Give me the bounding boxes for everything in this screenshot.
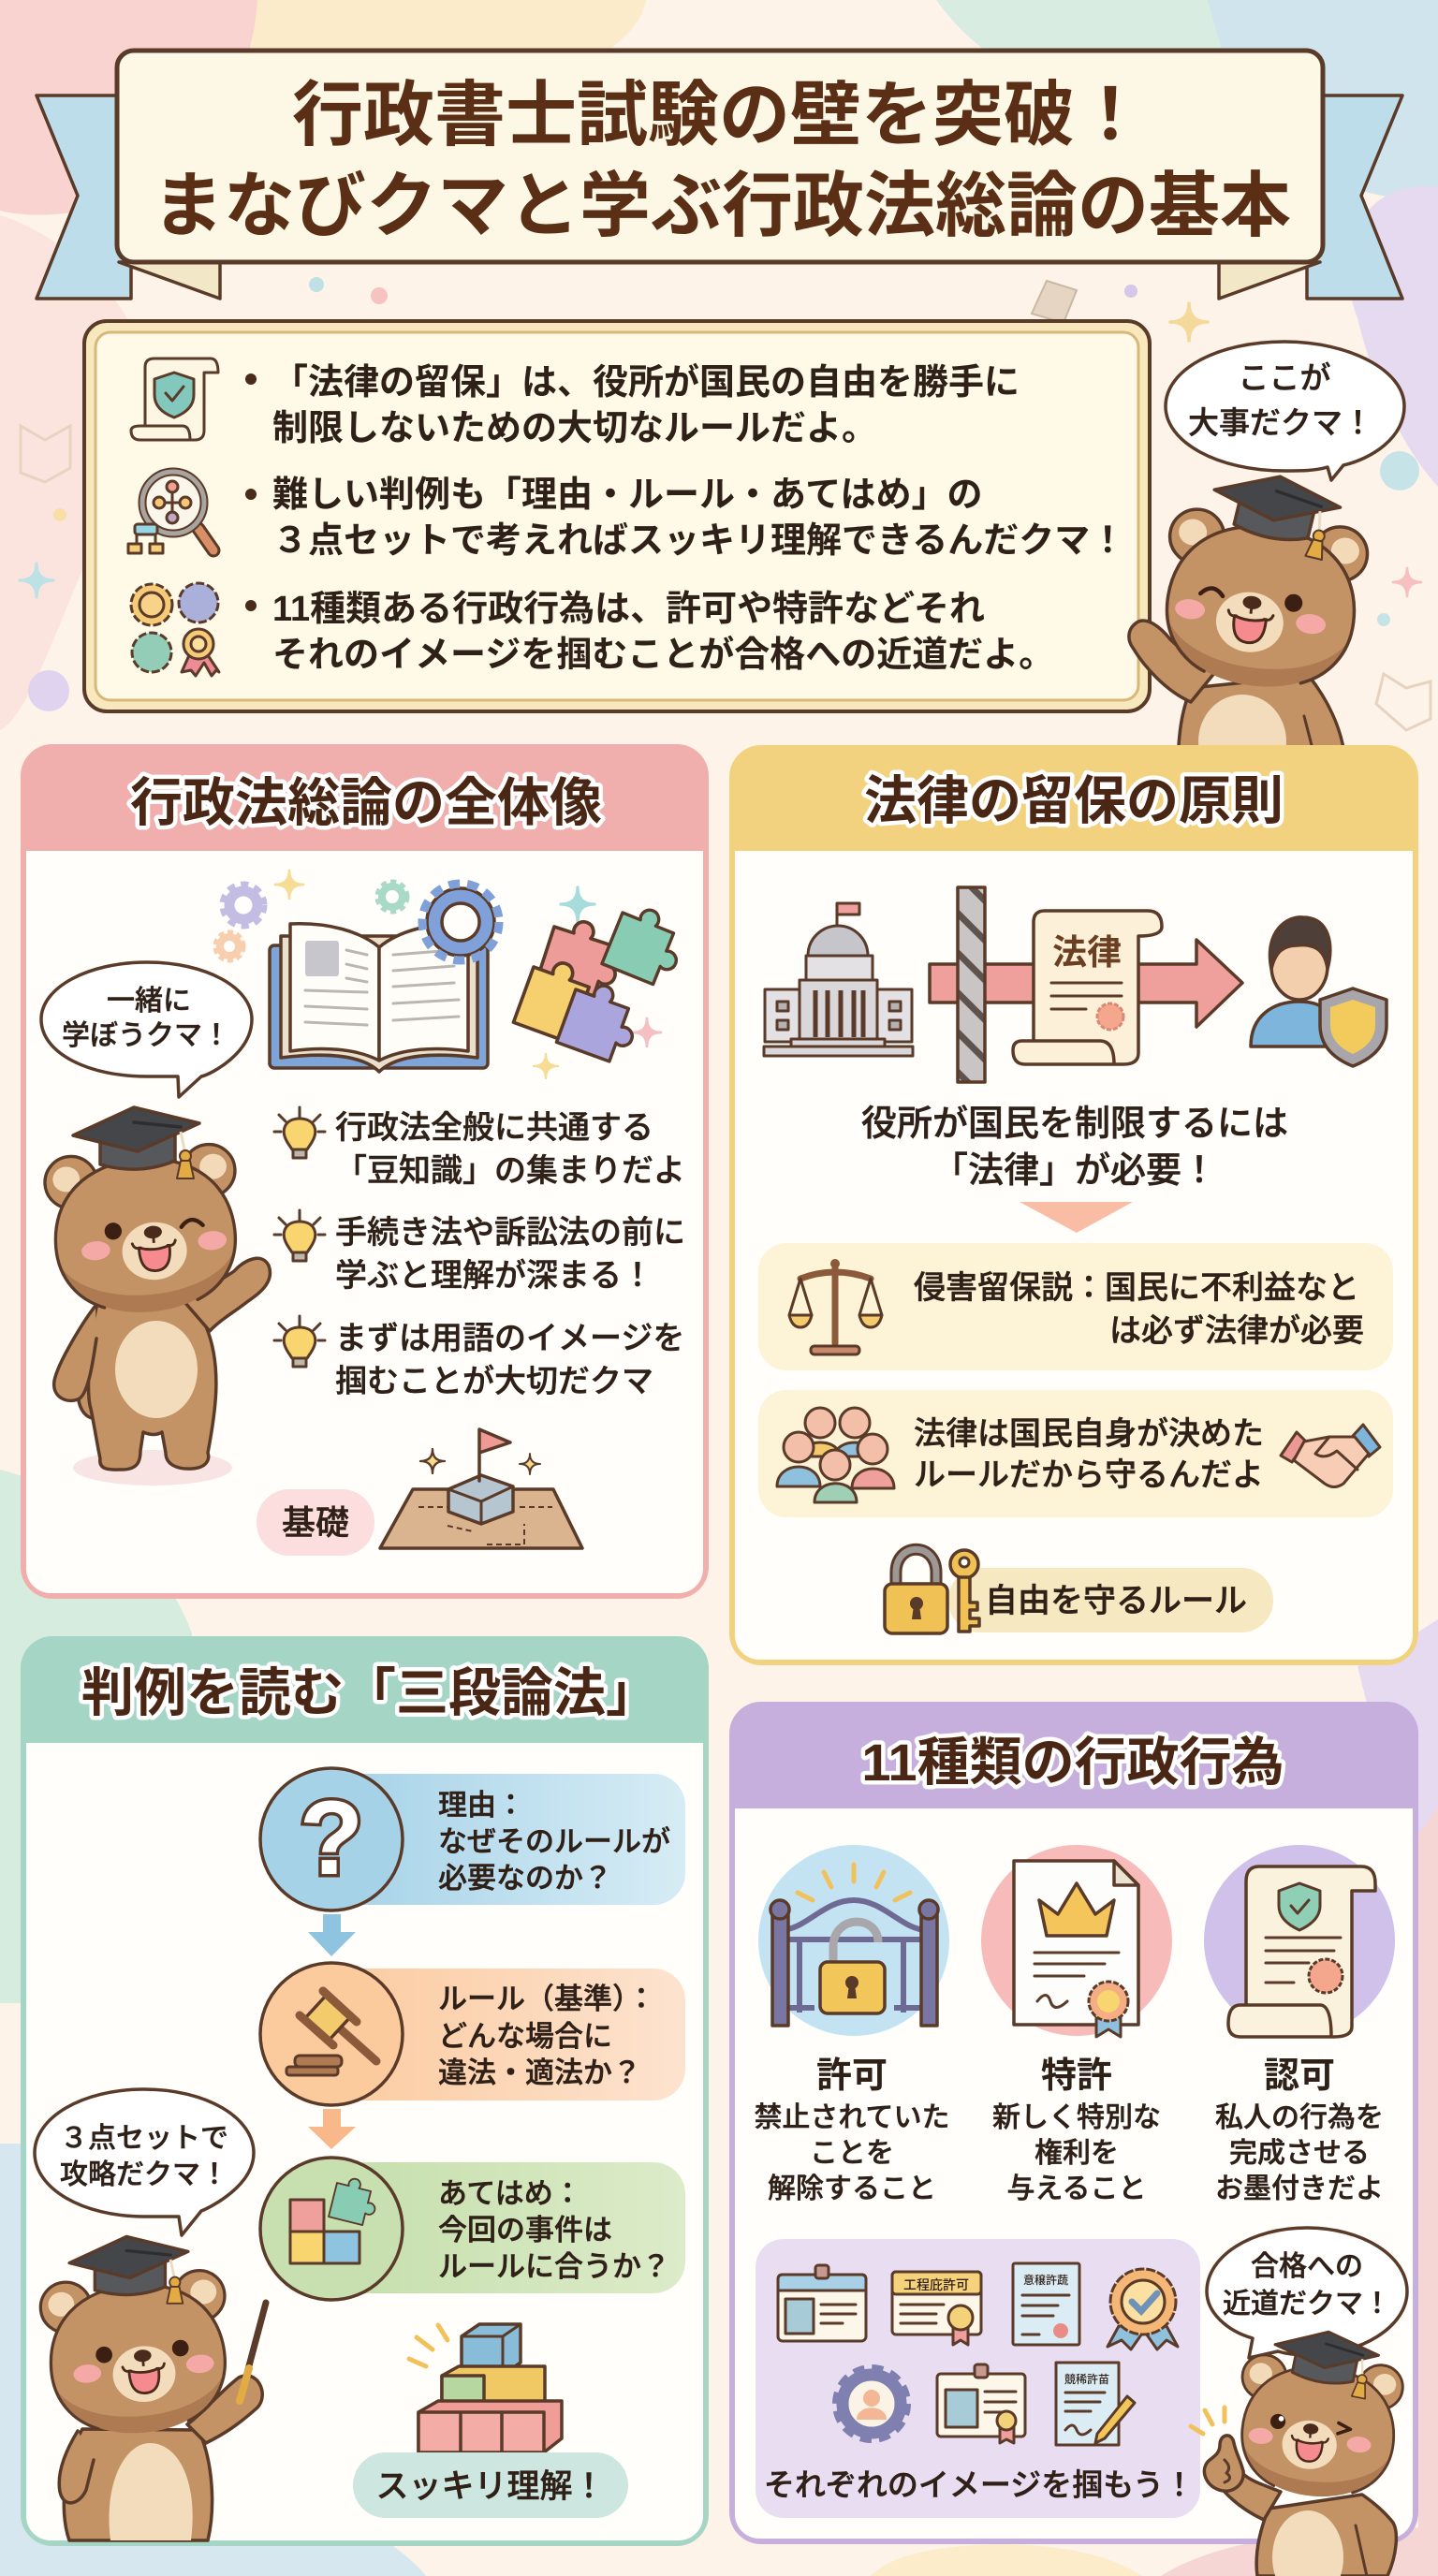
- bullet 3 text: 11種類ある行政行為は、許可や特許などそれ: [272, 590, 985, 629]
- icon: foundation with flag: [380, 1429, 582, 1548]
- item: approval: [1204, 1845, 1395, 2204]
- step: reason: ?: [300, 1779, 363, 1896]
- decorative sparkles and dots: [20, 277, 1431, 730]
- step: rule: ルール（基準）：: [438, 1983, 655, 2015]
- item: patent: 特許: [1041, 2056, 1112, 2096]
- item: approval: 認可: [1264, 2056, 1335, 2096]
- icon: protected person: [1251, 917, 1387, 1066]
- tip 1: [274, 1107, 685, 1189]
- item: permission: [754, 1845, 950, 2204]
- icon: document with pencil: 競稀許苗: [1064, 2372, 1109, 2386]
- title plate: [117, 51, 1323, 262]
- item: patent: 与えること: [1006, 2174, 1147, 2204]
- step: reason: 理由：: [438, 1789, 525, 1822]
- tip 2: [274, 1210, 685, 1294]
- panel: case law syllogism: [21, 1636, 709, 2546]
- bear mascot: [43, 1107, 270, 1486]
- step: application: 今回の事件は: [438, 2214, 612, 2247]
- statement: [861, 1105, 1288, 1191]
- tip 1: 「豆知識」の集まりだよ: [335, 1153, 685, 1189]
- icon: certificate with crown: [1014, 1861, 1138, 2037]
- heading: 判例を読む「三段論法」: [81, 1663, 658, 1722]
- speech bubble: 学ぼうクマ！: [62, 1020, 230, 1051]
- icon: scroll with shield: [1228, 1866, 1375, 2037]
- icon: puzzle pieces: [513, 900, 691, 1066]
- icon: document with pencil: [1056, 2363, 1135, 2445]
- item: permission: 解除すること: [768, 2174, 936, 2204]
- step: application: あてはめ：: [438, 2177, 582, 2210]
- step: application: [260, 2158, 685, 2300]
- statement: 役所が国民を制限するには: [861, 1105, 1288, 1144]
- text: ルールだから守るんだよ: [914, 1457, 1264, 1493]
- item: patent: [981, 1845, 1172, 2204]
- text: [914, 1416, 1264, 1493]
- statement: 「法律」が必要！: [932, 1151, 1217, 1191]
- speech bubble top right: ここが: [1238, 360, 1331, 395]
- pill: clear understanding: [353, 2452, 628, 2518]
- title banner: [37, 51, 1402, 299]
- tip 3: [274, 1316, 684, 1399]
- speech bubble: 攻略だクマ！: [60, 2159, 228, 2190]
- icon: blue document: 意穣許蔬: [1023, 2273, 1068, 2287]
- icon: blue document: [1013, 2263, 1079, 2345]
- tip 1: 行政法全般に共通する: [335, 1110, 653, 1146]
- step: reason: [260, 1768, 685, 1910]
- step: rule: 違法・適法か？: [438, 2056, 641, 2089]
- icon: group of people: [777, 1408, 894, 1502]
- bear mascot thumbs up: [1191, 2322, 1404, 2576]
- step: reason: 必要なのか？: [438, 1862, 612, 1895]
- box: image gallery: [756, 2239, 1200, 2518]
- icon: government building: [764, 903, 913, 1056]
- item: patent: 新しく特別な: [992, 2102, 1161, 2133]
- icon: id with ribbon: [937, 2364, 1025, 2443]
- label pill: foundation: 基礎: [282, 1503, 349, 1542]
- icon: stacked blocks: [409, 2324, 562, 2452]
- tip 2: 学ぶと理解が深まる！: [335, 1258, 653, 1294]
- speech bubble: [1207, 2228, 1407, 2358]
- bullet 2 text: ３点セットで考えればスッキリ理解できるんだクマ！: [272, 521, 1125, 561]
- heading: 行政法総論の全体像: [130, 773, 602, 832]
- speech bubble top right: 大事だクマ！: [1188, 405, 1373, 440]
- title line 2: まなびクマと学ぶ行政法総論の基本: [153, 167, 1291, 246]
- text: 法律は国民自身が決めた: [914, 1416, 1264, 1452]
- row: people decide the law: [758, 1390, 1393, 1517]
- bullet 2 text: [245, 476, 1125, 561]
- item: approval: 私人の行為を: [1215, 2102, 1384, 2133]
- icon: law scroll: [1013, 911, 1162, 1064]
- icon: badge: [1108, 2269, 1178, 2349]
- icon: puzzle: [290, 2174, 381, 2263]
- panel: overview of general administrative law: [21, 744, 709, 1599]
- item: permission: 禁止されていた: [754, 2102, 950, 2133]
- heading: 11種類の行政行為: [861, 1733, 1284, 1792]
- pill: rule protecting freedom: 自由を守るルール: [985, 1583, 1247, 1619]
- speech bubble: 合格への: [1251, 2251, 1363, 2282]
- speech bubble: [41, 962, 252, 1097]
- step: rule: どんな場合に: [438, 2020, 612, 2053]
- tip 3: まずは用語のイメージを: [335, 1321, 684, 1356]
- icon: gears and sparkles: [215, 871, 661, 1078]
- bear mascot top right: [1129, 462, 1371, 788]
- text: は必ず法律が必要: [1109, 1313, 1364, 1349]
- icon: gavel: [286, 1991, 376, 2075]
- icon: law scroll: 法律: [1052, 933, 1122, 972]
- icon: business licence: 工程庇許可: [903, 2277, 969, 2292]
- panel: 11 types of administrative acts: [729, 1702, 1418, 2576]
- icon: scales: [789, 1259, 882, 1354]
- speech bubble top right: [1166, 342, 1404, 480]
- speech bubble: ３点セットで: [60, 2123, 228, 2154]
- speech bubble: 近道だクマ！: [1223, 2289, 1391, 2320]
- label pill: foundation: [257, 1489, 374, 1556]
- bullet 3 text: [245, 590, 1054, 675]
- item: permission: ことを: [810, 2138, 894, 2169]
- icon: seals: [131, 583, 219, 676]
- icon: scroll with shield: [131, 359, 218, 440]
- item: patent: 権利を: [1034, 2138, 1119, 2169]
- caption: それぞれのイメージを掴もう！: [764, 2467, 1195, 2502]
- icon: handshake: [1281, 1425, 1380, 1486]
- right ribbon: [1219, 95, 1402, 299]
- panel: key points summary: [84, 321, 1150, 711]
- icon: gear with person: [836, 2368, 907, 2439]
- bullet 3 text: それのイメージを掴むことが合格への近道だよ。: [272, 636, 1054, 675]
- tip 2: 手続き法や訴訟法の前に: [335, 1215, 685, 1251]
- step: reason: なぜそのルールが: [438, 1825, 670, 1858]
- icon: id card: [778, 2265, 866, 2341]
- speech bubble: [35, 2089, 254, 2235]
- arrow down orange: [308, 2109, 356, 2149]
- left ribbon: [37, 95, 220, 299]
- bullet 1 text: [245, 363, 1020, 448]
- item: approval: お墨付きだよ: [1215, 2174, 1384, 2204]
- icon: business licence: [892, 2272, 981, 2345]
- pill: clear understanding: スッキリ理解！: [375, 2468, 606, 2505]
- arrow down blue: [308, 1914, 356, 1956]
- text: [914, 1270, 1364, 1349]
- item: permission: 許可: [816, 2056, 888, 2096]
- bear mascot with pointer: [38, 2236, 266, 2540]
- step: rule: [260, 1963, 685, 2105]
- bullet 1 text: 「法律の留保」は、役所が国民の自由を勝手に: [272, 363, 1020, 402]
- icon: gate with open lock: [770, 1865, 938, 2026]
- icon: lock and key: [885, 1549, 979, 1633]
- pill: rule protecting freedom: [948, 1568, 1273, 1632]
- title line 1: 行政書士試験の壁を突破！: [292, 76, 1146, 155]
- icon: wall: [958, 887, 985, 1082]
- icon: magnifier with chart: [128, 472, 213, 553]
- panel: principle of legal reservation: [729, 745, 1418, 1665]
- icon: open book: [270, 924, 488, 1072]
- tip 3: 掴むことが大切だクマ: [335, 1364, 653, 1399]
- step: application: ルールに合うか？: [438, 2250, 670, 2283]
- item: approval: 完成させる: [1229, 2138, 1370, 2169]
- icon: arrow: [930, 940, 1242, 1027]
- row: infringement reservation theory: [758, 1243, 1393, 1370]
- bullet 1 text: 制限しないための大切なルールだよ。: [272, 409, 877, 448]
- heading: 法律の留保の原則: [864, 771, 1284, 830]
- arrow down: [1020, 1202, 1133, 1233]
- text: 侵害留保説：国民に不利益なと: [914, 1270, 1359, 1306]
- icon: large gear: [422, 884, 499, 960]
- speech bubble: 一緒に: [107, 986, 191, 1017]
- bullet 2 text: 難しい判例も「理由・ルール・あてはめ」の: [272, 476, 982, 515]
